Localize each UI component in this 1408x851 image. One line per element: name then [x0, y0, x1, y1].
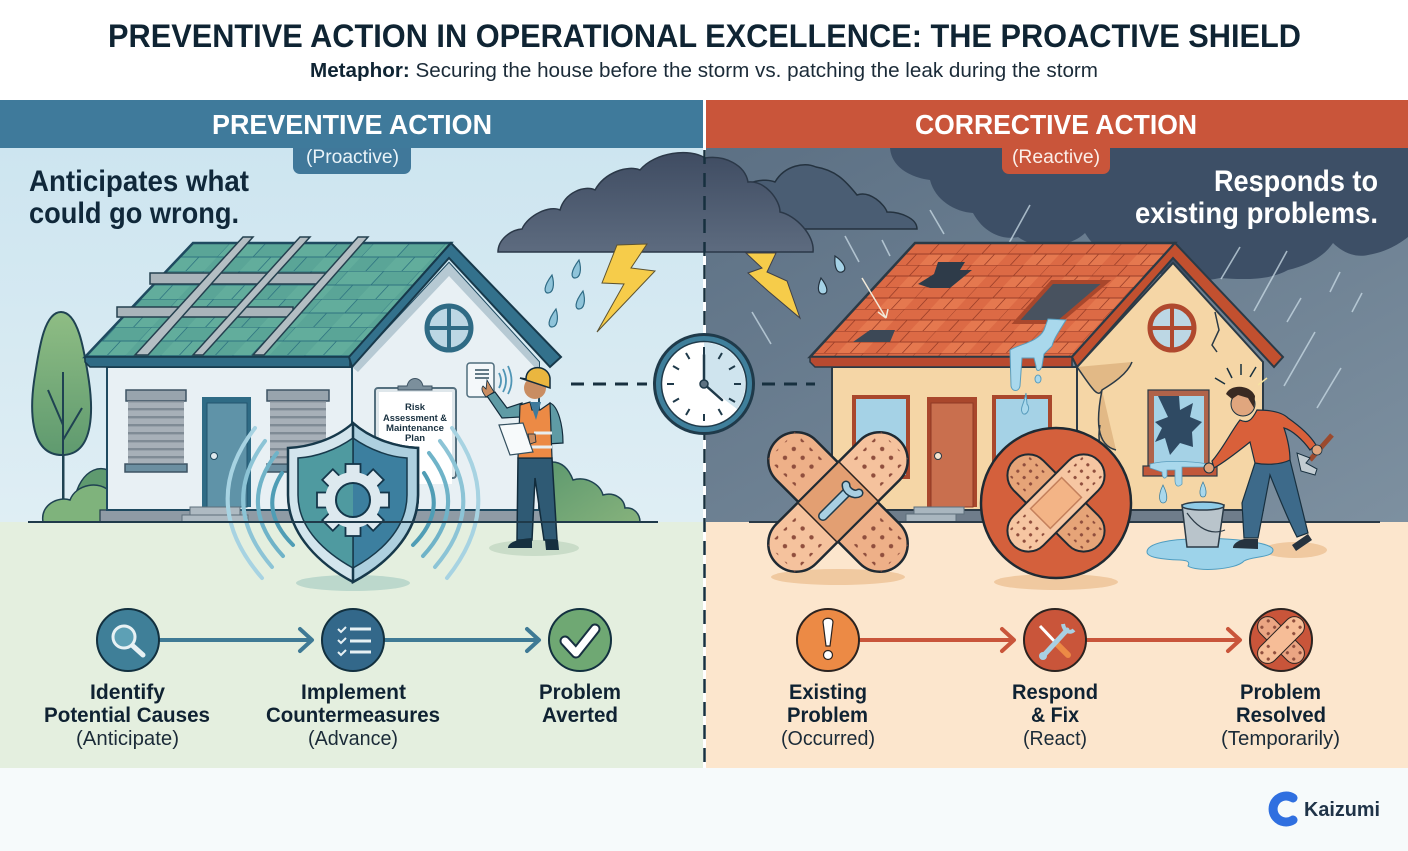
worker head: [524, 377, 546, 399]
tree: [32, 312, 91, 522]
logo: Kaizumi: [1273, 796, 1380, 822]
step label: averted: Averted: [542, 704, 618, 727]
centre divider: [703, 150, 706, 768]
preventive statement: Anticipates what: [29, 165, 249, 198]
preventive header bar: [0, 100, 703, 148]
step label: identify: (Anticipate): [76, 728, 179, 750]
left bushes: [43, 469, 160, 522]
panel: corrective action: [706, 100, 1408, 768]
hammer: [1297, 435, 1332, 475]
worker arm lower: [530, 403, 563, 445]
house: preventive: [85, 237, 561, 522]
ground line right: [749, 521, 1380, 523]
roof eave: [810, 357, 1072, 367]
wall crack: [1077, 362, 1132, 472]
foundation: [820, 510, 1262, 522]
clipboard: risk plan: Assessment &: [383, 413, 447, 424]
step arrow 2: [1086, 629, 1240, 651]
step label: averted: Problem: [539, 681, 621, 704]
back storm cloud: [738, 165, 917, 229]
main wall: [107, 367, 352, 510]
bandage X: [757, 421, 919, 585]
step arrow 1: [159, 629, 312, 651]
corrective ground: [706, 522, 1408, 768]
clock: [653, 333, 755, 435]
wall control panel: [467, 363, 512, 397]
broken window: [1148, 390, 1209, 466]
tab: proactive: (Proactive): [306, 147, 399, 168]
clipboard: risk plan: Risk: [405, 402, 426, 413]
steps: [182, 507, 248, 522]
icon: check: [549, 609, 611, 671]
corrective statement: Responds to: [1214, 165, 1378, 198]
corrective sky: [706, 148, 1408, 522]
clock connector left: [571, 382, 647, 386]
worker: [482, 368, 579, 556]
step label: identify: Identify: [90, 681, 165, 704]
step label: identify: Potential Causes: [44, 704, 210, 727]
step label: resolved: Problem: [1240, 681, 1321, 704]
step label: implement: (Advance): [308, 728, 398, 750]
shield gear: [317, 464, 389, 536]
foundation: [100, 510, 542, 522]
step label: averted: [539, 681, 621, 727]
gable trim: [1072, 243, 1283, 367]
step label: respond: & Fix: [1031, 704, 1079, 727]
subtitle: Metaphor: Securing the house before the storm vs. patching the leak during the storm: [310, 60, 1098, 82]
man with hammer: [1204, 364, 1332, 551]
tab: proactive: [293, 147, 411, 174]
storm cloud: top right: [890, 148, 1408, 280]
worker legs: [517, 458, 557, 540]
hard hat: [520, 368, 550, 388]
gable inner shadow: [352, 263, 539, 372]
door: [927, 397, 977, 507]
step label: respond: [1012, 681, 1098, 750]
worker ground shadow: [489, 540, 579, 556]
man legs: [1242, 460, 1308, 538]
shield ground shadow: [296, 575, 410, 591]
gable crack: [1212, 312, 1219, 352]
bandage disc: [981, 428, 1131, 590]
step label: implement: [266, 681, 440, 750]
roof hole 1: [918, 262, 972, 288]
worker clipboard: [499, 423, 533, 455]
step label: existing: Problem: [787, 704, 868, 727]
round window: [1150, 306, 1194, 350]
step label: implement: Countermeasures: [266, 704, 440, 727]
disc shadow: [994, 574, 1118, 590]
man head: [1226, 387, 1255, 416]
roof hole 2: [853, 330, 895, 342]
icon: checklist: [322, 609, 384, 671]
preventive statement: could go wrong.: [29, 197, 239, 230]
shield: [288, 423, 418, 582]
corrective header bar: [706, 100, 1408, 148]
puddle: [1147, 539, 1273, 569]
roof: [85, 243, 451, 357]
step arrow 2: [384, 629, 539, 651]
gable wing: [1077, 263, 1263, 510]
window sill: [1143, 461, 1217, 503]
icon: exclamation: [797, 609, 859, 671]
worker arm raised: [487, 392, 522, 418]
worker vest: [518, 402, 552, 458]
left shutter: [125, 390, 187, 472]
right shutter: [267, 390, 329, 472]
preventive sky: [0, 148, 703, 522]
ground line left: [28, 521, 658, 523]
icon: magnifier: [97, 609, 159, 671]
bandage shadow: [771, 569, 905, 585]
logo: Kaizumi: Kaizumi: [1304, 799, 1380, 821]
step label: resolved: [1221, 681, 1340, 750]
gable trim: [349, 243, 561, 367]
tab: reactive: [1002, 147, 1110, 174]
bandage wrench: [823, 485, 859, 516]
window left: [854, 397, 908, 477]
step label: existing: (Occurred): [781, 728, 875, 750]
arrow debris: [862, 278, 888, 318]
step label: respond: Respond: [1012, 681, 1098, 704]
rain drops left: [545, 260, 584, 327]
icon: small bandage: [1250, 609, 1312, 671]
lightning left: [597, 244, 655, 332]
rain streaks: [752, 205, 1362, 408]
corrective statement: [1135, 165, 1378, 230]
icon: tools: [1024, 609, 1086, 671]
water leak: [1010, 319, 1066, 414]
door: [202, 397, 251, 507]
clock connector right: [762, 382, 815, 386]
man shadow: [1263, 542, 1327, 558]
man shoes: [1233, 534, 1312, 551]
corrective heading: CORRECTIVE ACTION: [915, 109, 1197, 140]
lightning right: [746, 253, 800, 318]
step label: implement: Implement: [301, 681, 406, 704]
step label: respond: (React): [1023, 728, 1087, 750]
panel: preventive action: [0, 100, 703, 768]
step label: existing: Existing: [789, 681, 867, 704]
corrective process: [781, 609, 1340, 750]
storm bars: [117, 237, 368, 355]
preventive ground: [0, 522, 703, 768]
worker hands: [482, 380, 536, 444]
step label: resolved: Resolved: [1236, 704, 1326, 727]
bucket: [1182, 502, 1225, 547]
step label: resolved: (Temporarily): [1221, 728, 1340, 750]
corrective statement: existing problems.: [1135, 197, 1378, 230]
main storm cloud: [498, 153, 813, 252]
shield wave arcs: [228, 428, 478, 578]
title: PREVENTIVE ACTION IN OPERATIONAL EXCELLENCE: THE PROACTIVE SHIELD: [108, 18, 1301, 54]
man shirt: [1212, 410, 1316, 468]
preventive heading: PREVENTIVE ACTION: [212, 109, 492, 140]
clipboard: risk plan: Maintenance: [386, 423, 444, 434]
window centre: [994, 397, 1050, 467]
step arrow 1: [859, 629, 1014, 651]
clipboard: risk plan: [375, 378, 456, 484]
clipboard: risk plan: Plan: [405, 433, 425, 444]
round window: [427, 306, 471, 350]
worker boots: [508, 538, 559, 550]
alarm lines: [1215, 364, 1267, 385]
rain drops right: [818, 256, 845, 294]
steps: [906, 507, 964, 522]
main wall: [832, 367, 1077, 510]
footer band: [0, 768, 1408, 851]
roof: [810, 243, 1175, 357]
step label: existing: [781, 681, 875, 750]
preventive process: [44, 609, 621, 750]
step label: identify: [44, 681, 210, 750]
right bushes: [552, 462, 640, 522]
preventive statement: [29, 165, 249, 230]
man hand: [1204, 463, 1214, 473]
gable wing: [352, 263, 539, 510]
roof eave: [85, 357, 350, 367]
skylight: [1016, 282, 1106, 322]
house: corrective: [810, 243, 1283, 522]
tab: reactive: (Reactive): [1012, 147, 1100, 168]
